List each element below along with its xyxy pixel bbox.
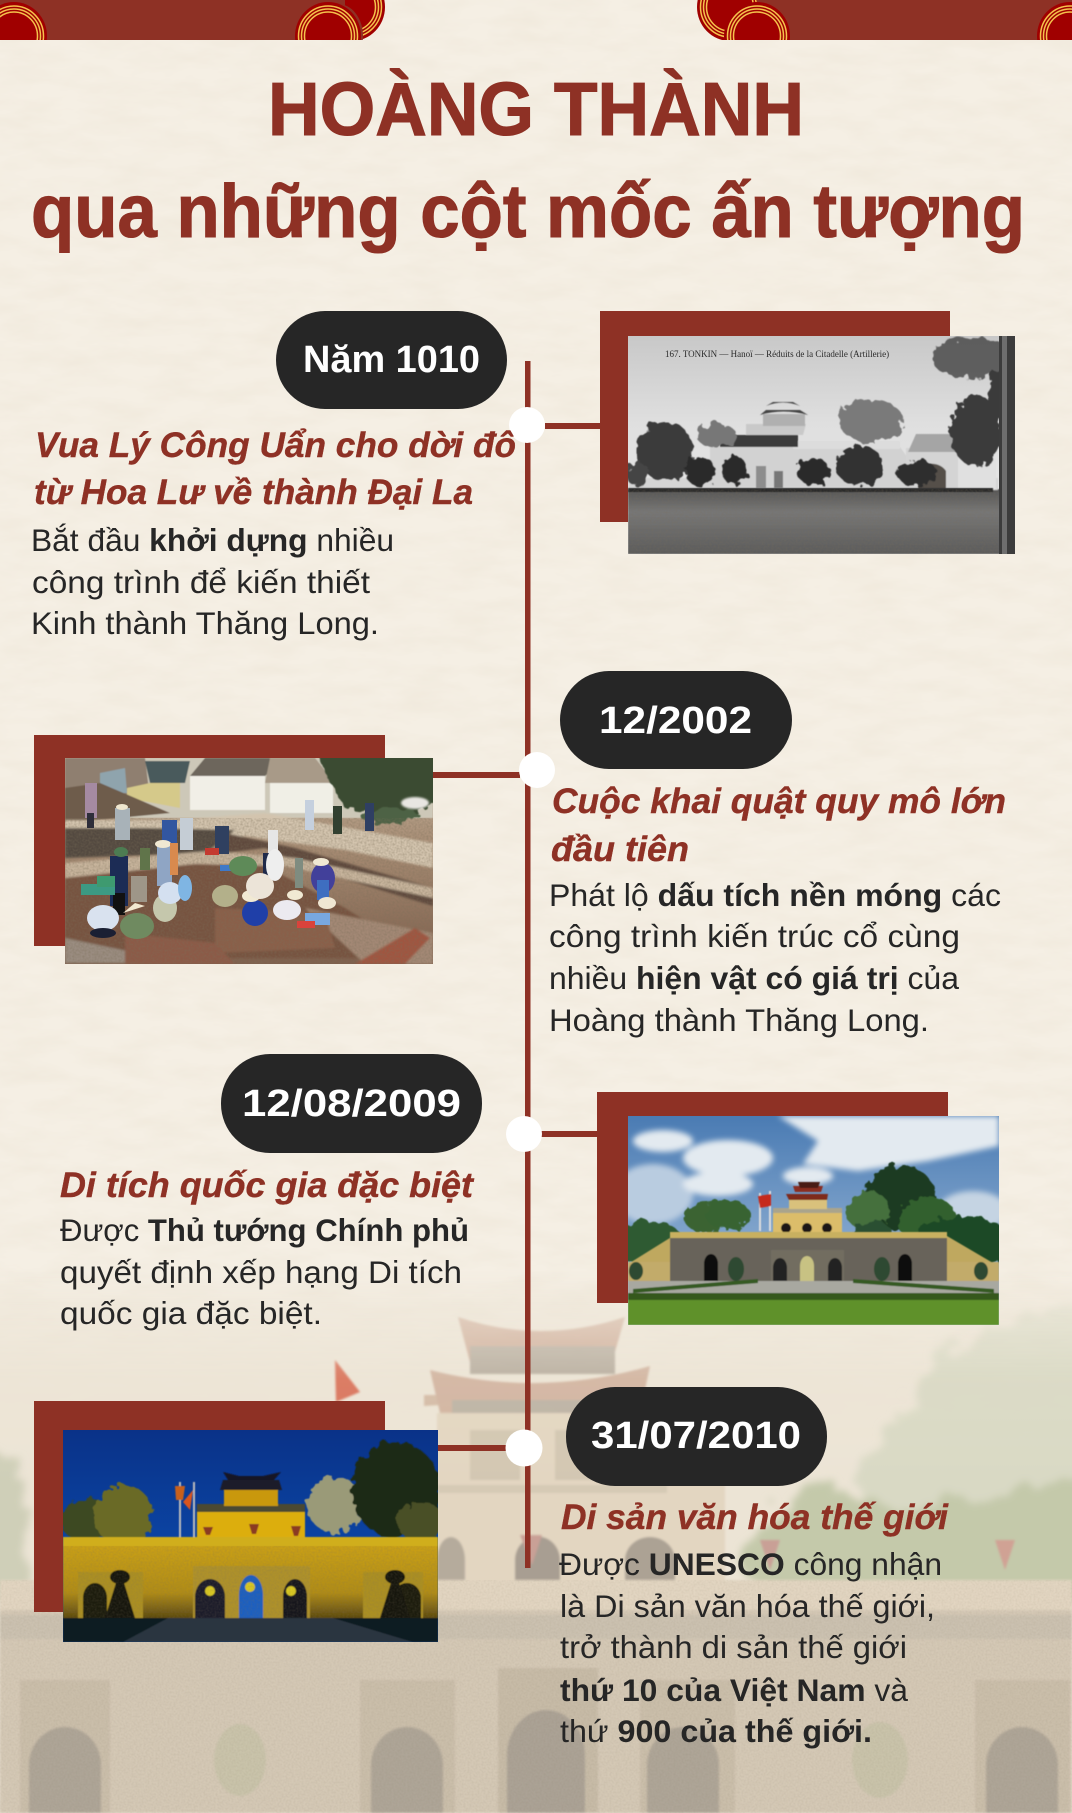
heading: Cuộc khai quật quy mô lớn: [552, 781, 1006, 821]
date pill: [276, 311, 507, 409]
postcard caption: 167. TONKIN — Hanoï — Réduits de la Citadelle (Artillerie): [665, 349, 889, 359]
description: Hoàng thành Thăng Long.: [549, 1002, 929, 1038]
heading: từ Hoa Lư về thành Đại La: [34, 472, 473, 512]
description: quốc gia đặc biệt.: [60, 1295, 322, 1331]
connector: [545, 423, 601, 429]
heading: [34, 425, 516, 512]
top banner: right scroll: [697, 0, 1072, 40]
panel: milestone 31/07/2010: [34, 1387, 949, 1749]
timeline node: [506, 1430, 542, 1466]
top banner: left scroll: [0, 0, 385, 40]
red photo frame: [600, 311, 950, 522]
citadel flag: [335, 1360, 360, 1402]
connector: [433, 772, 520, 778]
panel: milestone 12/08/2009: [60, 1054, 1013, 1331]
panel: milestone 12/2002: [34, 671, 1006, 1038]
description: công trình kiến trúc cổ cùng: [549, 918, 960, 954]
panel: milestone 1010: [31, 311, 1015, 641]
timeline node: [519, 752, 555, 788]
description: thứ 10 của Việt Nam và: [560, 1672, 908, 1708]
description: Được UNESCO công nhận: [559, 1546, 942, 1582]
date pill: 12/08/2009: [242, 1083, 461, 1125]
timeline node: [509, 407, 545, 443]
heading: đầu tiên: [551, 829, 689, 869]
photo: excavation site: [65, 758, 433, 964]
photo: old citadel postcard: [628, 336, 1015, 554]
description: [60, 1212, 469, 1331]
description: Kinh thành Thăng Long.: [31, 605, 379, 641]
timeline vertical line: [525, 361, 530, 1568]
description: quyết định xếp hạng Di tích: [60, 1254, 462, 1290]
description: Được Thủ tướng Chính phủ: [60, 1212, 469, 1248]
date pill: Năm 1010: [303, 339, 480, 381]
description: thứ 900 của thế giới.: [560, 1713, 872, 1749]
photo: Doan Mon gate at night: [63, 1430, 438, 1642]
date pill: [560, 671, 792, 769]
date pill: [221, 1054, 482, 1153]
description: công trình để kiến thiết: [32, 564, 370, 600]
description: [559, 1546, 942, 1749]
description: Bắt đầu khởi dựng nhiều: [31, 522, 394, 558]
title: [31, 67, 1025, 253]
connector: [438, 1445, 508, 1451]
description: [31, 522, 394, 641]
heading: [551, 781, 1006, 869]
date pill: 31/07/2010: [591, 1415, 801, 1457]
heading: Vua Lý Công Uẩn cho dời đô: [35, 425, 516, 465]
description: [549, 877, 1001, 1038]
description: trở thành di sản thế giới: [560, 1629, 907, 1665]
red photo frame: [34, 1401, 385, 1612]
description: Phát lộ dấu tích nền móng các: [549, 877, 1001, 913]
date pill: [566, 1387, 827, 1486]
description: là Di sản văn hóa thế giới,: [560, 1588, 935, 1624]
description: nhiều hiện vật có giá trị của: [549, 960, 959, 996]
workers: [81, 783, 374, 939]
date pill: 12/2002: [599, 700, 752, 742]
heading: Di tích quốc gia đặc biệt: [60, 1165, 475, 1205]
photo: Doan Mon gate by day: [628, 1116, 999, 1325]
red photo frame: [597, 1092, 948, 1303]
title: HOÀNG THÀNH: [268, 67, 804, 151]
timeline node: [506, 1116, 542, 1152]
heading: Di sản văn hóa thế giới: [561, 1497, 949, 1537]
red photo frame: [34, 735, 385, 946]
title: qua những cột mốc ấn tượng: [31, 169, 1025, 253]
faded citadel background photo: [0, 1270, 1072, 1813]
connector: [540, 1131, 598, 1137]
